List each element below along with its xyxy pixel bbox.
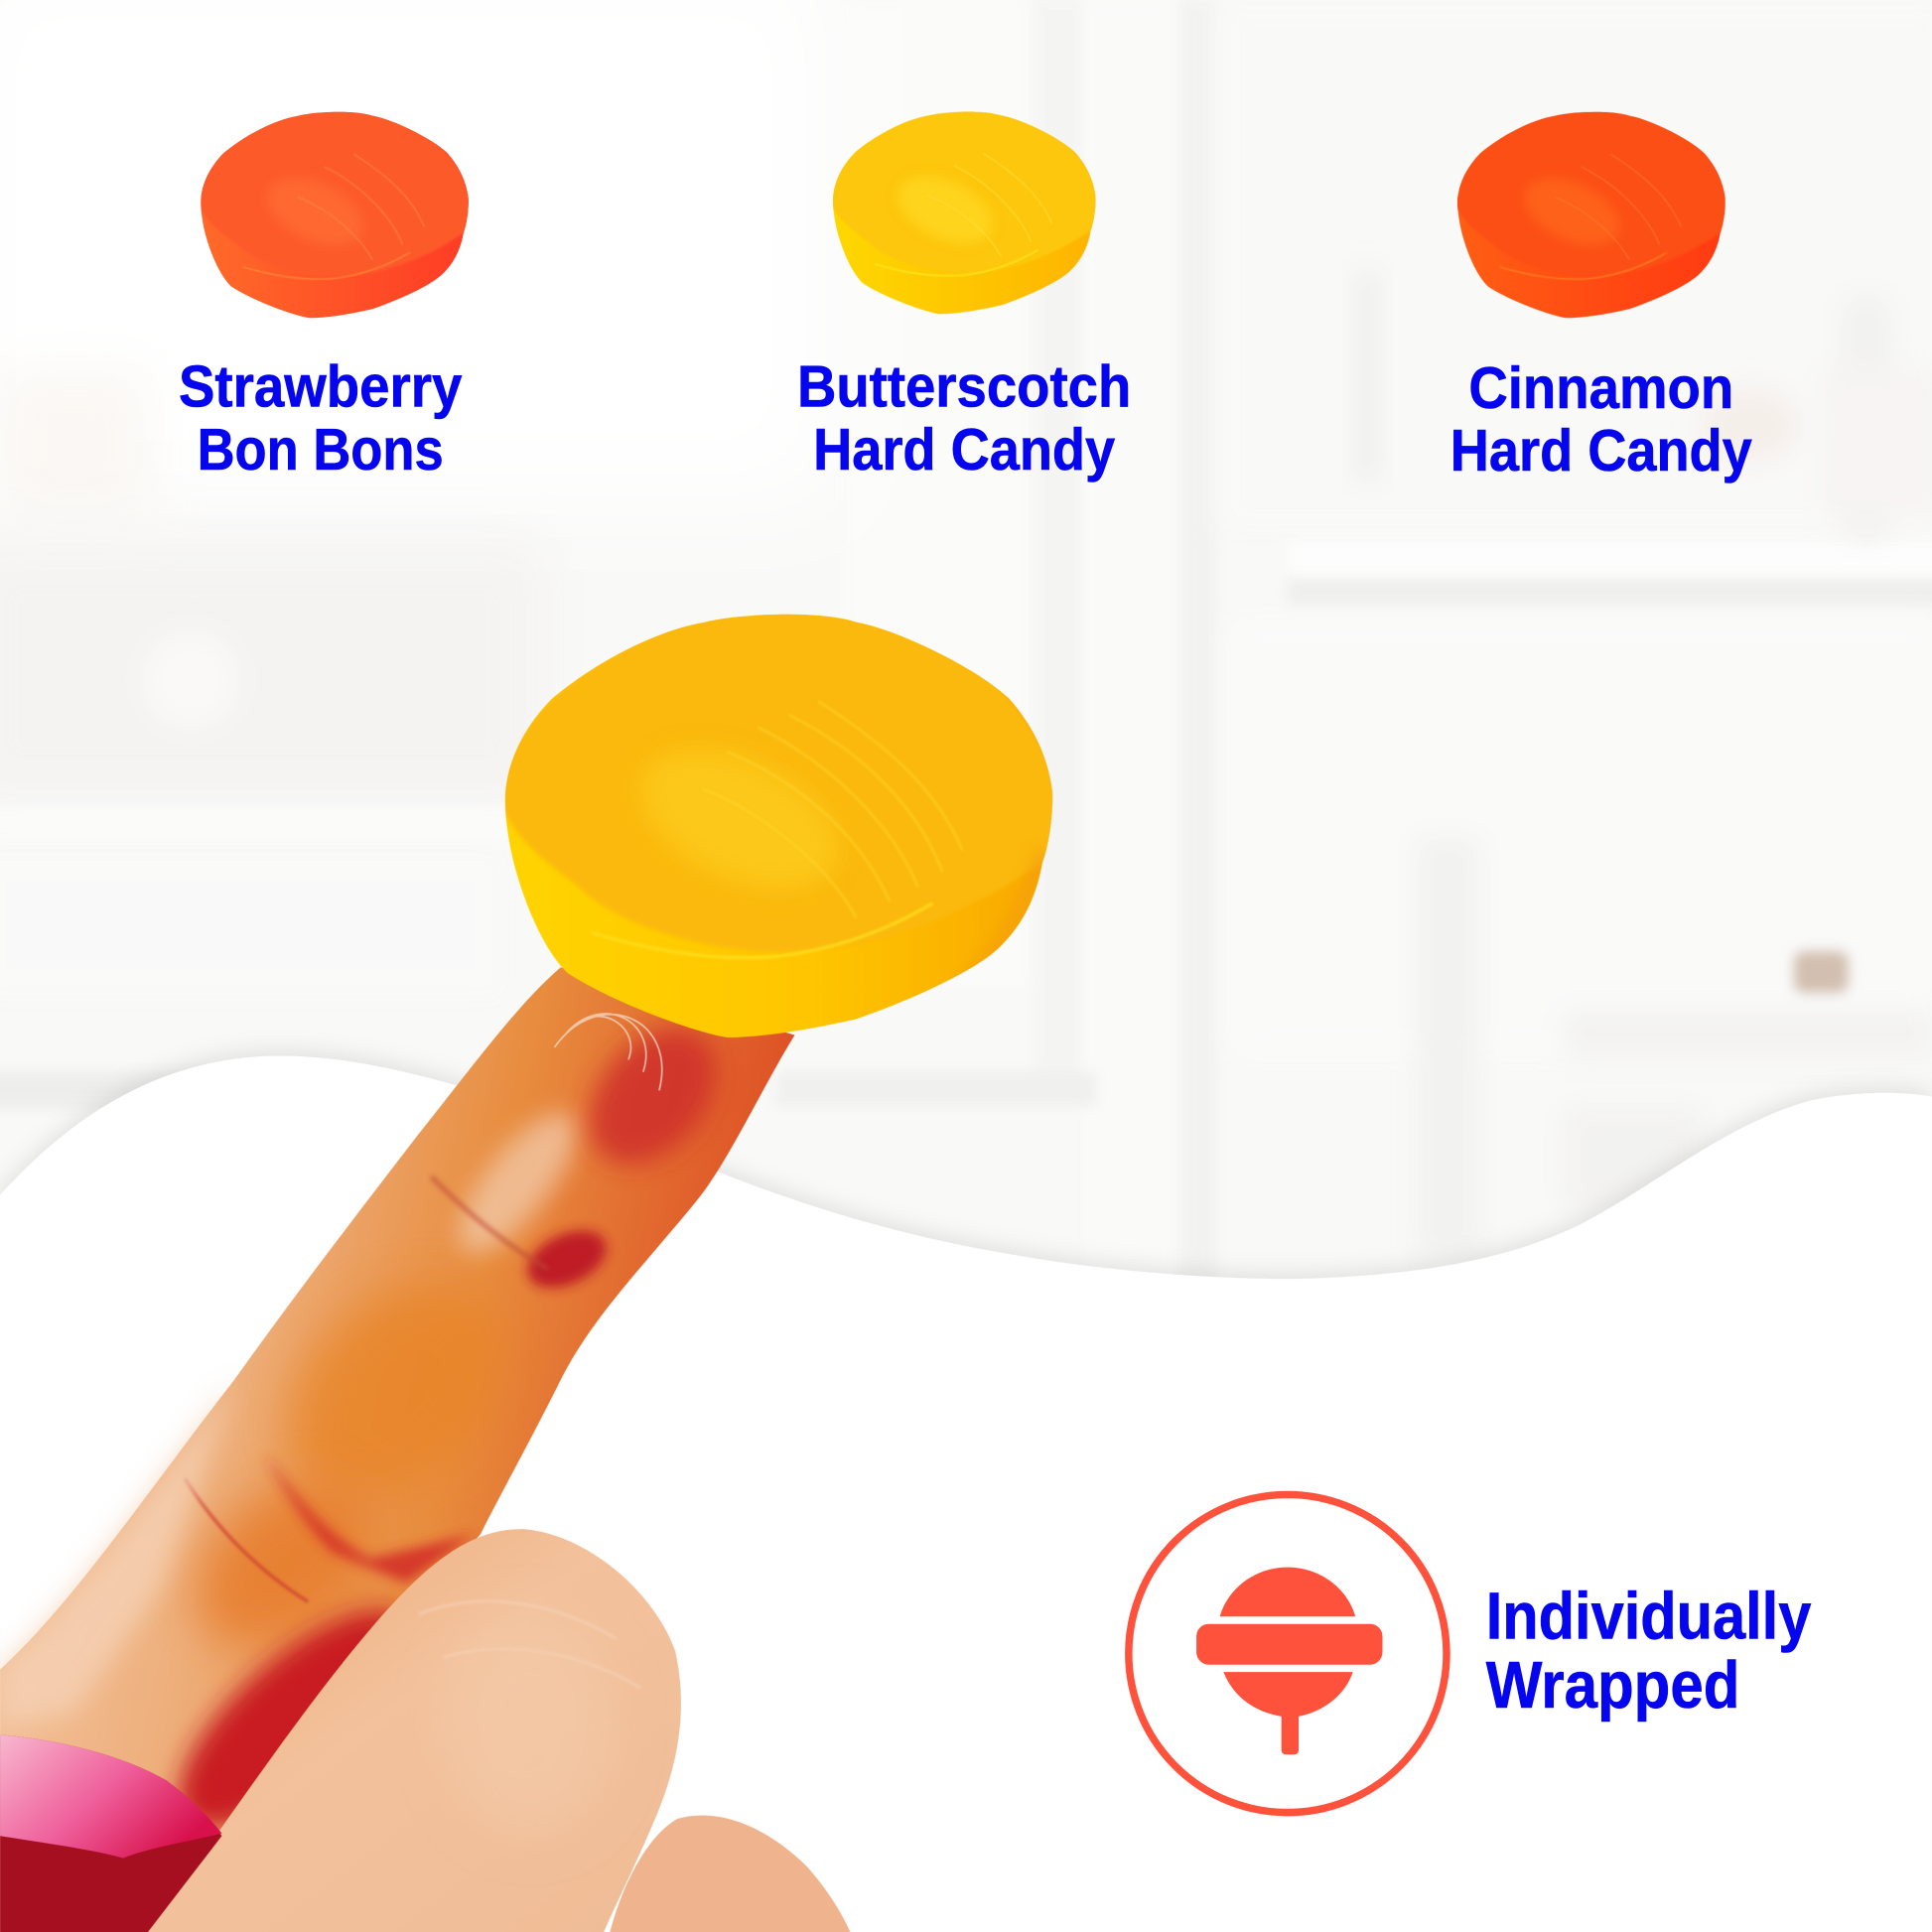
candy: strawberry bbox=[198, 107, 473, 318]
label: individually wrapped: Wrapped bbox=[1486, 1648, 1739, 1723]
icon: wrapped lollipop in circle bbox=[1129, 1494, 1447, 1813]
label: cinnamon hard candy: Hard Candy bbox=[1450, 417, 1752, 483]
white wave panel bbox=[0, 1056, 1932, 1932]
candy: cinnamon bbox=[1454, 107, 1729, 318]
label: butterscotch hard candy: Butterscotch bbox=[797, 353, 1131, 420]
middle finger / thumb bbox=[148, 1529, 681, 1932]
nail bbox=[0, 1734, 221, 1932]
label: cinnamon hard candy bbox=[1450, 354, 1752, 483]
label: butterscotch hard candy: Hard Candy bbox=[813, 416, 1115, 483]
label: individually wrapped bbox=[1486, 1580, 1811, 1723]
candy: butterscotch bbox=[830, 107, 1099, 314]
label: strawberry bon bons: Strawberry bbox=[179, 353, 462, 420]
label: cinnamon hard candy: Cinnamon bbox=[1468, 354, 1733, 421]
label: individually wrapped: Individually bbox=[1486, 1580, 1811, 1654]
hand holding candy bbox=[0, 967, 850, 1932]
index finger bbox=[0, 967, 794, 1932]
large butterscotch candy bbox=[499, 605, 1060, 1037]
label: strawberry bon bons: Bon Bons bbox=[198, 416, 444, 483]
third finger bbox=[610, 1816, 850, 1932]
label: strawberry bon bons bbox=[179, 353, 462, 483]
label: butterscotch hard candy bbox=[797, 353, 1131, 483]
